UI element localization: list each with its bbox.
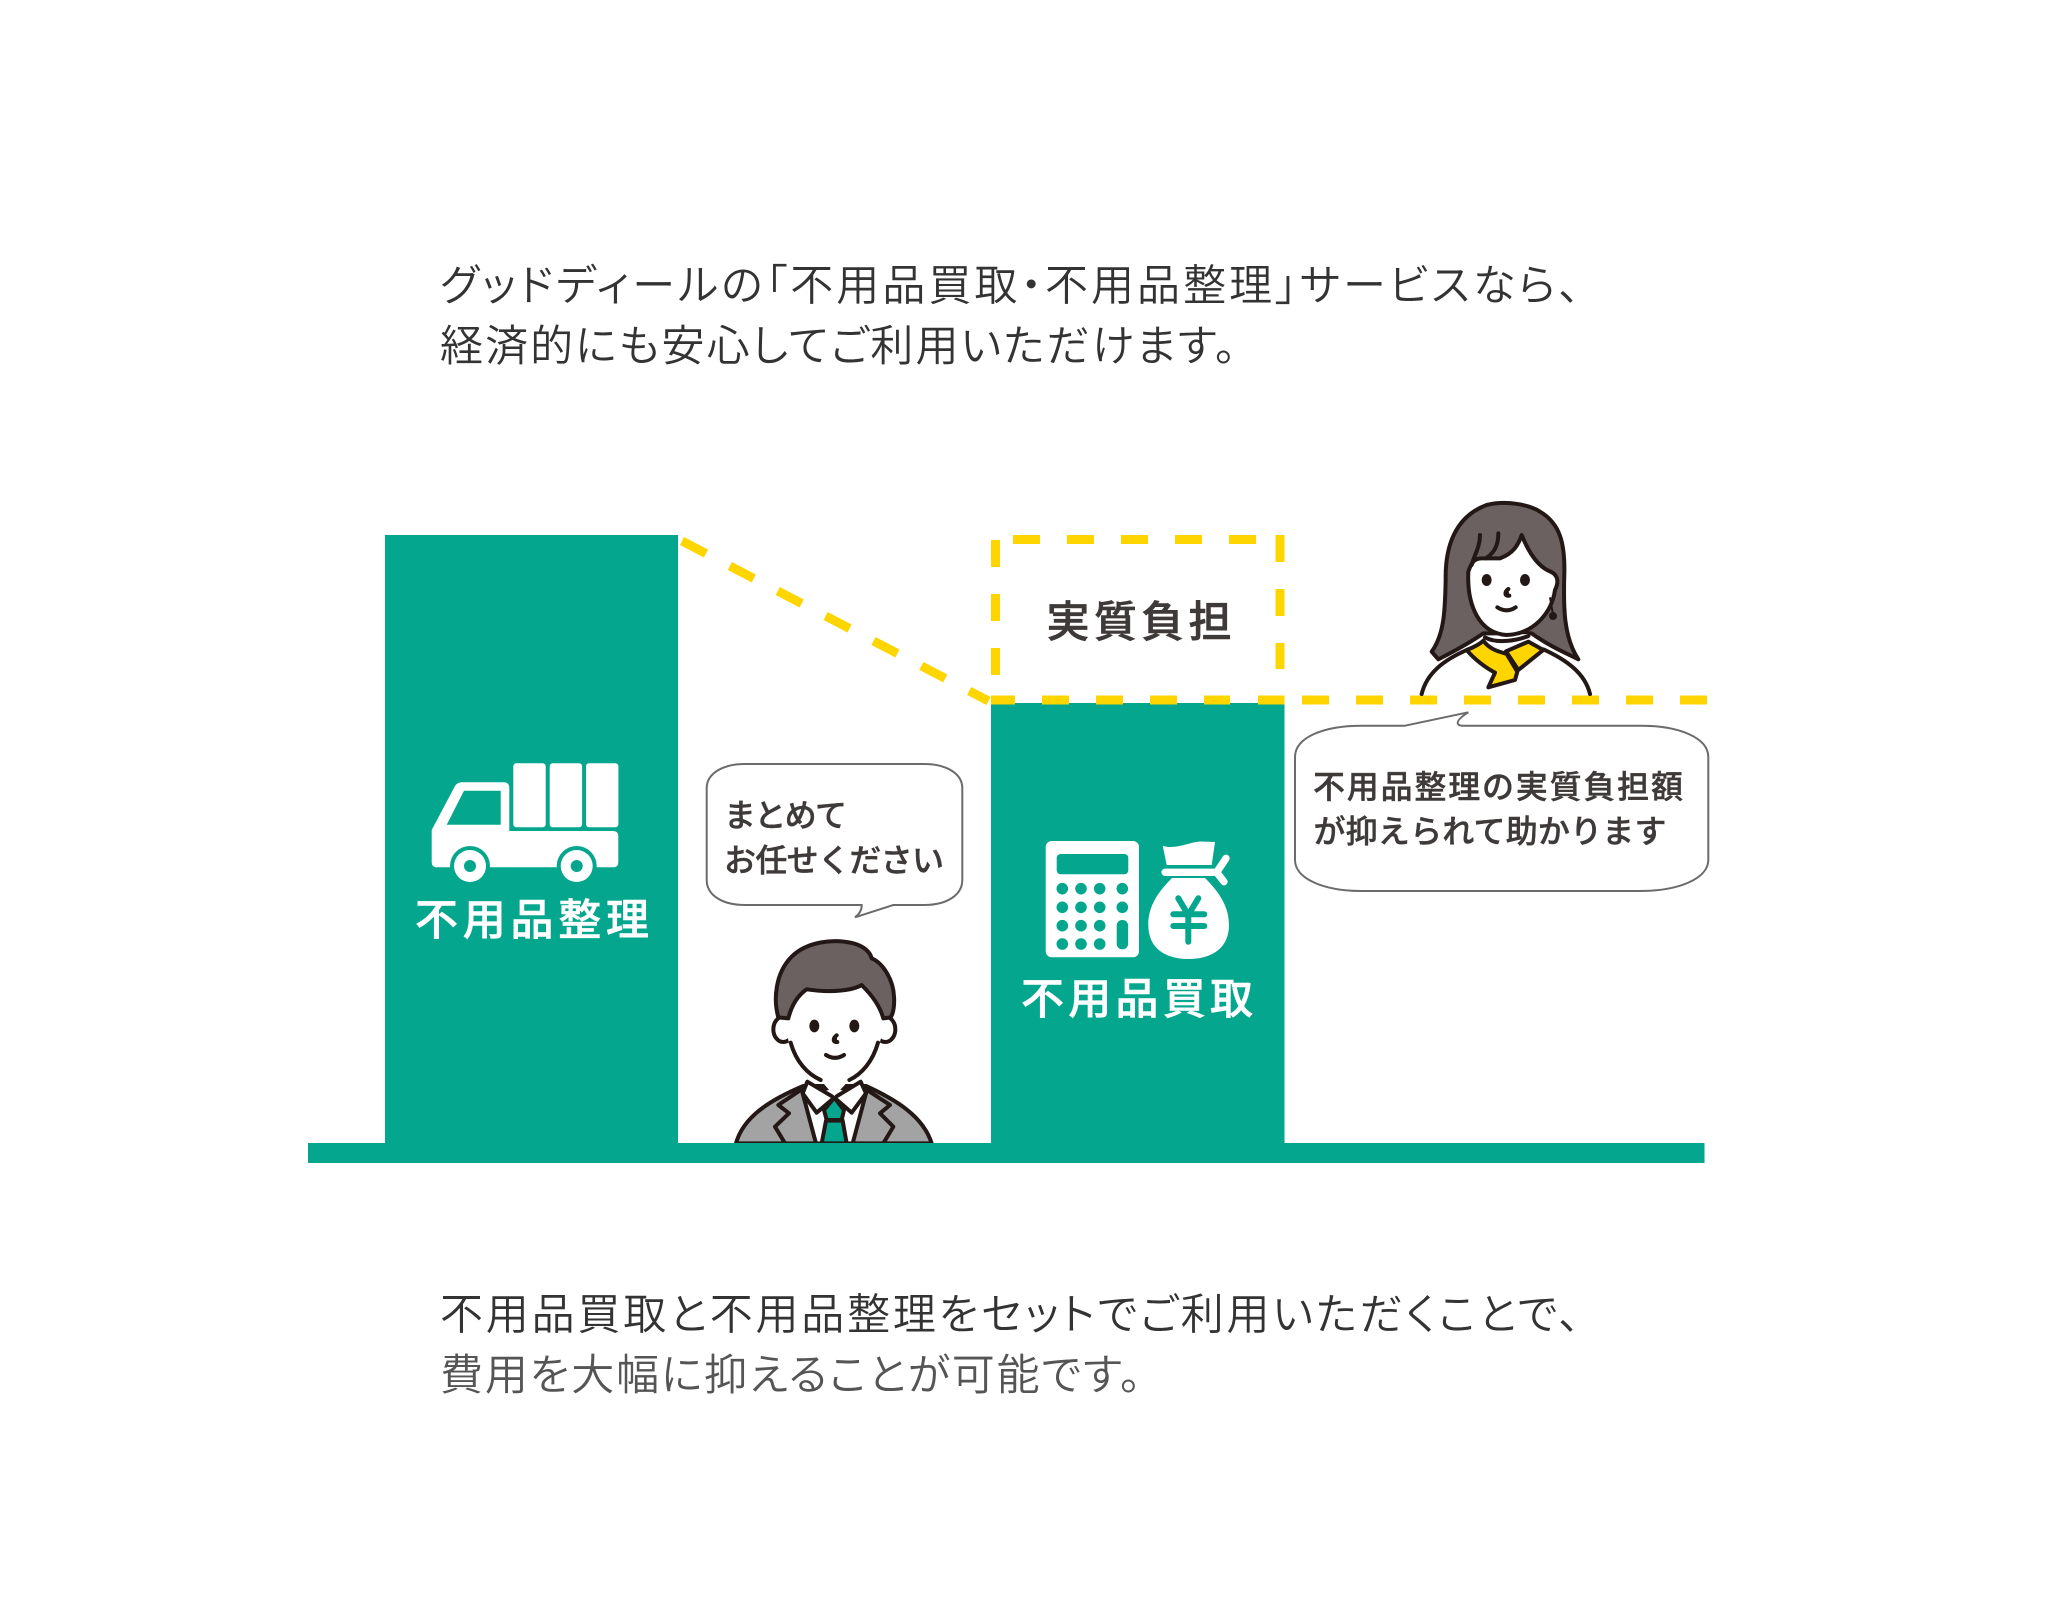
ground bar — [308, 1143, 1704, 1163]
closing text: 不用品買取と不用品整理をセットでご利用いただくことで、 — [440, 1292, 1580, 1340]
person: woman with scarf — [1422, 503, 1590, 694]
speech bubble: man: お任せください — [724, 842, 944, 878]
closing text — [440, 1292, 1580, 1400]
speech bubble: man — [707, 764, 962, 917]
label: 実質負担: 実質負担 — [1046, 599, 1232, 647]
icon: truck — [430, 763, 620, 888]
closing text: 費用を大幅に抑えることが可能です。 — [440, 1352, 1141, 1400]
bar: 不用品整理 — [385, 535, 678, 1145]
intro text: 経済的にも安心してご利用いただけます。 — [440, 323, 1236, 371]
speech bubble: woman: 不用品整理の実質負担額 — [1313, 769, 1683, 805]
label: 不用品買取: 不用品買取 — [1021, 976, 1253, 1024]
intro text: グッドディールの「不用品買取・不用品整理」サービスなら、 — [440, 262, 1580, 310]
icon: money bag — [1148, 842, 1229, 959]
icon: calculator — [1046, 841, 1139, 957]
speech bubble: woman — [1295, 712, 1708, 891]
label: 不用品整理: 不用品整理 — [415, 897, 649, 945]
speech bubble: woman: が抑えられて助かります — [1314, 814, 1666, 850]
bar: 不用品買取 — [991, 703, 1284, 1145]
intro text — [440, 262, 1580, 371]
dashed line: burden boundary — [682, 535, 1707, 701]
speech bubble: man: まとめて — [724, 798, 847, 834]
person: man in suit — [736, 941, 932, 1143]
